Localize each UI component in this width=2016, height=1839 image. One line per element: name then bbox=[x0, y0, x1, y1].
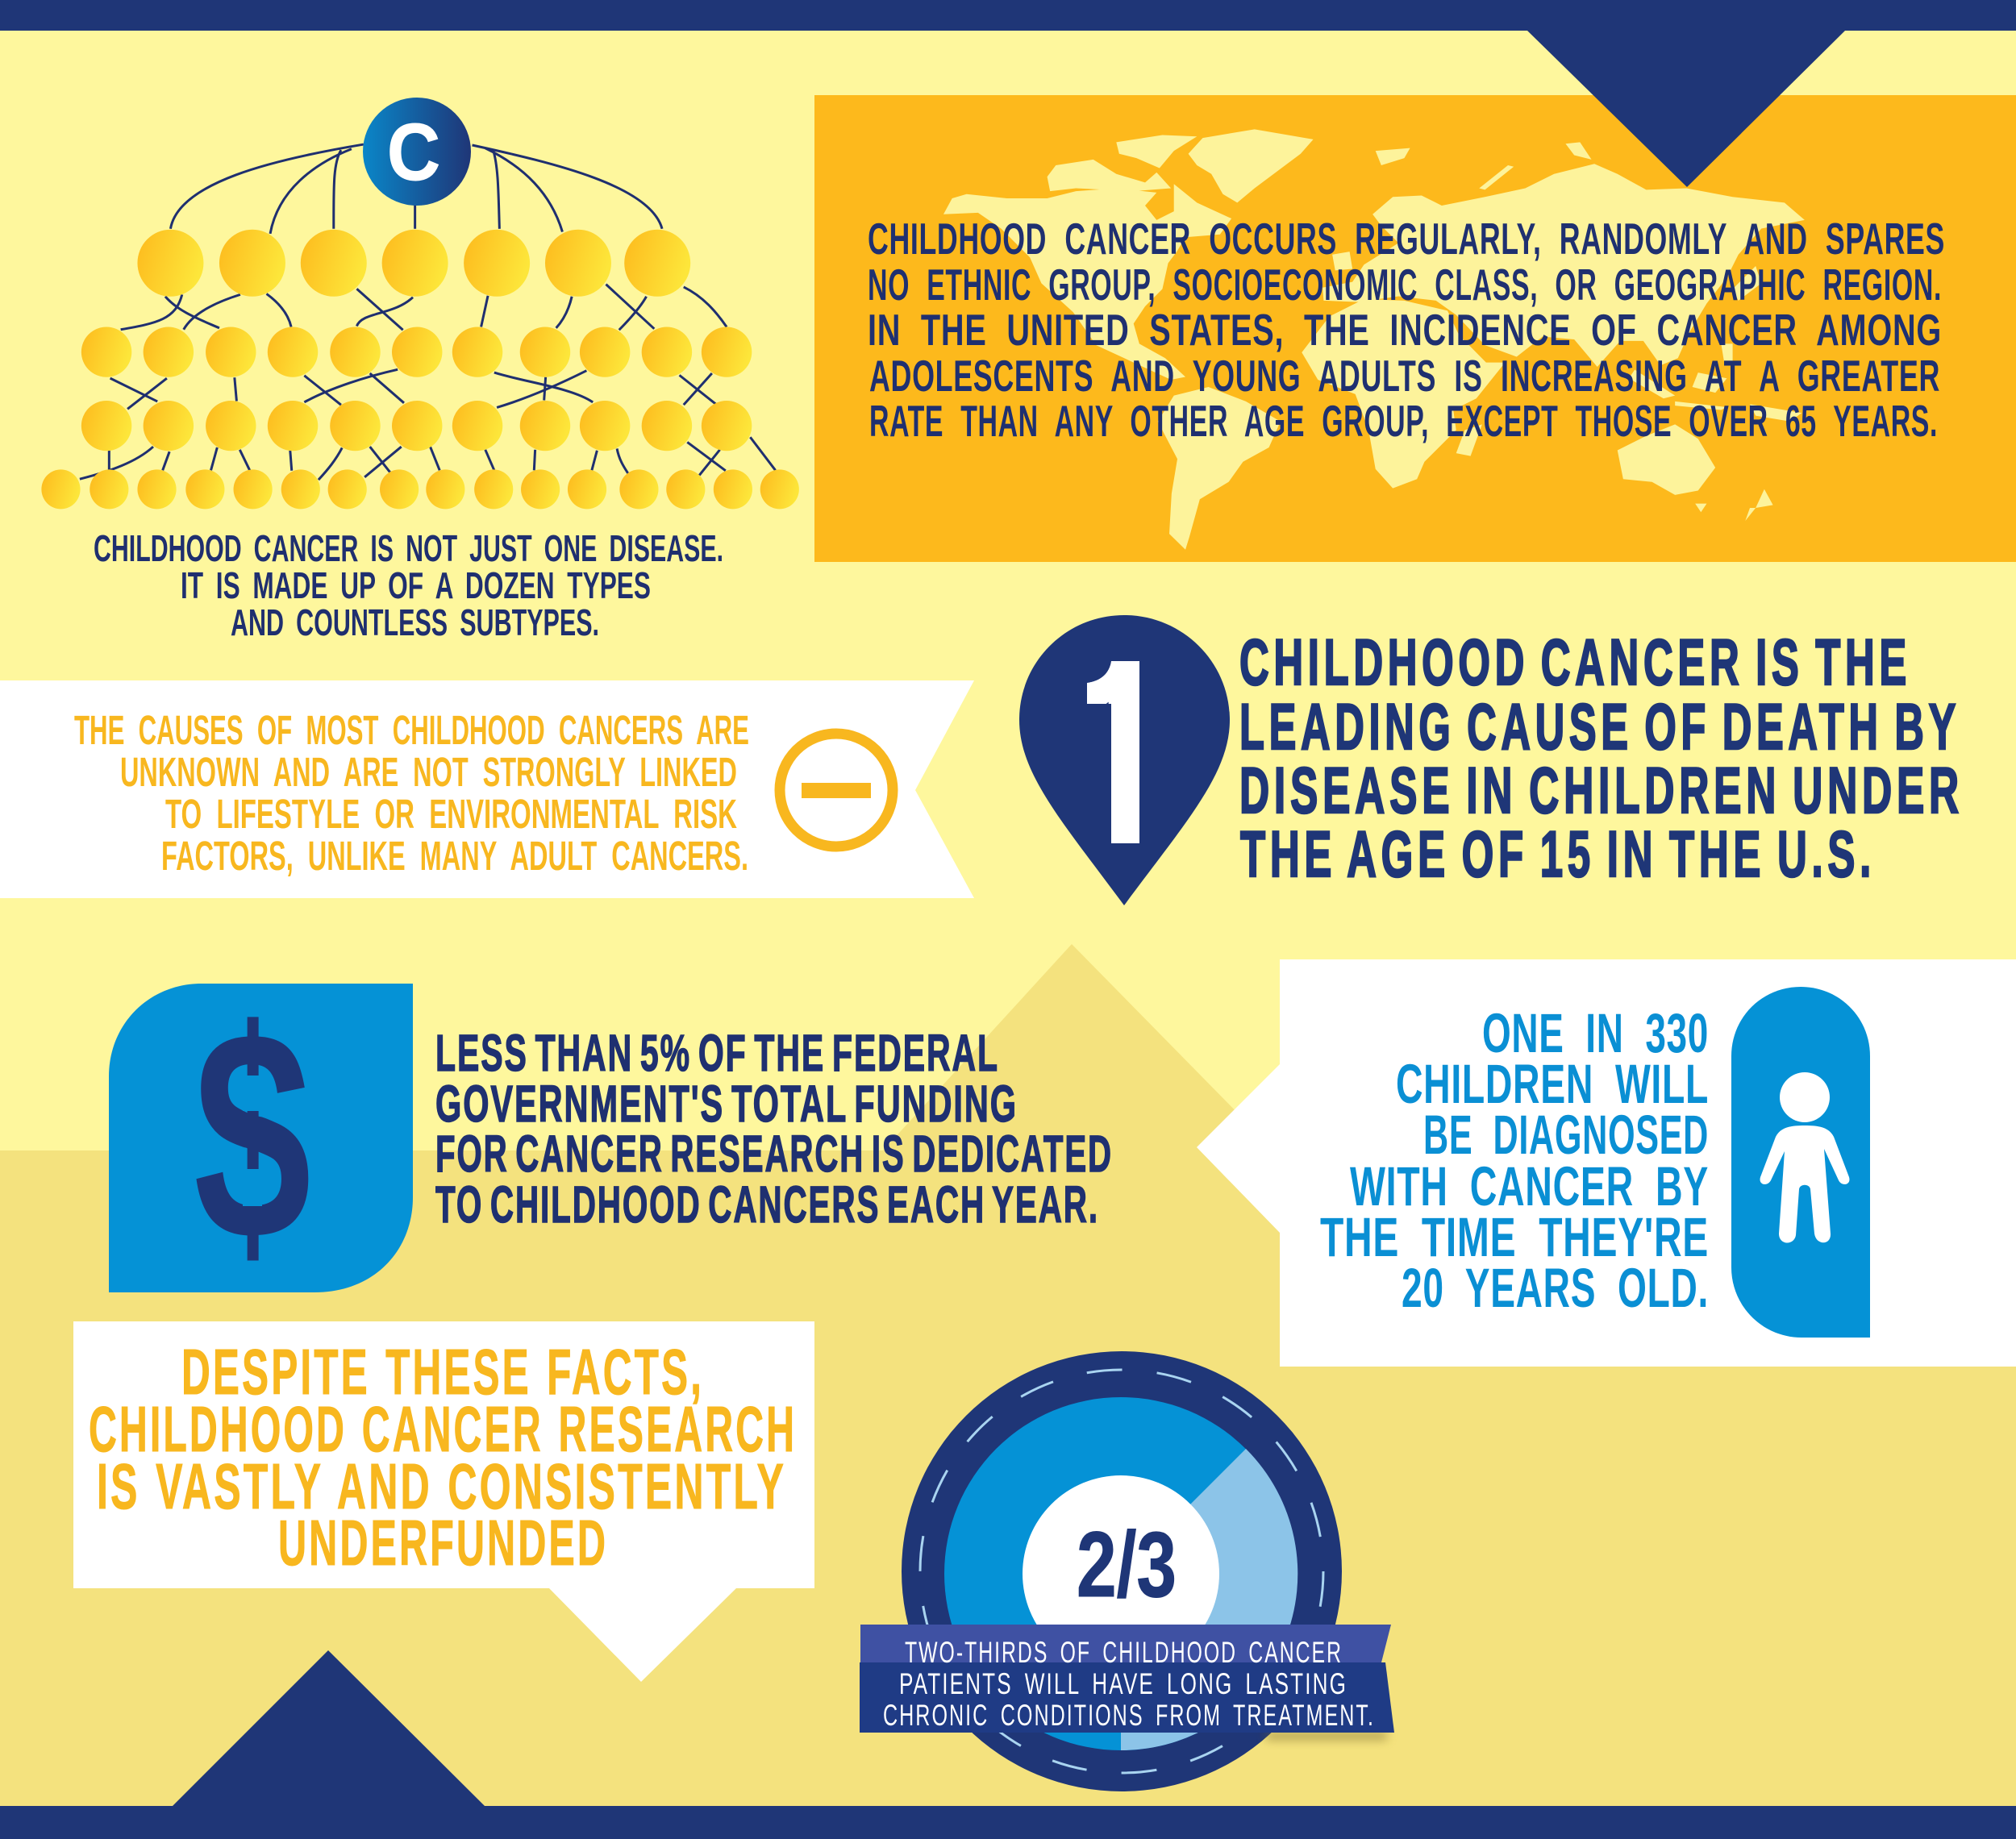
icon: dollar tile: $ bbox=[194, 969, 311, 1302]
text block: federal funding: LESS THAN 5% OF THE FEDERAL bbox=[435, 1024, 999, 1082]
text block: federal funding bbox=[435, 1024, 1113, 1234]
panel: causes ribbon bbox=[0, 680, 974, 898]
icon: child in blue pill bbox=[1731, 987, 1870, 1338]
icon: letter C badge: C bbox=[387, 107, 440, 198]
causes text: THE CAUSES OF MOST CHILDHOOD CANCERS ARE bbox=[74, 707, 749, 753]
causes text: FACTORS, UNLIKE MANY ADULT CANCERS. bbox=[161, 833, 748, 879]
one in 330 text: WITH CANCER BY bbox=[1350, 1155, 1709, 1217]
background: darker yellow lower area bbox=[0, 944, 2016, 1839]
one in 330 text: BE DIAGNOSED bbox=[1423, 1104, 1709, 1166]
icon: letter C badge bbox=[363, 98, 471, 206]
ribbon lower band bbox=[860, 1662, 1394, 1733]
icon: number one location pin: 1 bbox=[1064, 605, 1178, 899]
ring dashes bbox=[920, 1370, 1323, 1773]
ribbon upper band bbox=[860, 1625, 1391, 1662]
bubble shape bbox=[73, 1321, 814, 1682]
text block: federal funding: TO CHILDHOOD CANCERS EACH YEAR. bbox=[435, 1175, 1099, 1234]
tree caption text: AND COUNTLESS SUBTYPES. bbox=[231, 601, 599, 643]
underfunded text bbox=[89, 1336, 797, 1579]
underfunded text: CHILDHOOD CANCER RESEARCH bbox=[89, 1393, 797, 1465]
panel: one in 330 callout bbox=[1197, 959, 2016, 1367]
label: 2/3: 2/3 bbox=[1077, 1513, 1177, 1616]
ribbon text: TWO-THIRDS OF CHILDHOOD CANCER bbox=[905, 1636, 1343, 1669]
ribbon shape bbox=[0, 680, 974, 898]
badge outer ring bbox=[902, 1351, 1342, 1791]
icon: dollar tile bbox=[109, 969, 413, 1302]
chart: two-thirds donut badge bbox=[860, 1351, 1394, 1791]
world map continents bbox=[943, 129, 1805, 550]
pie: two-thirds segment bbox=[944, 1397, 1297, 1750]
tree nodes bbox=[41, 230, 799, 509]
heading: leading cause of death bbox=[1239, 626, 1964, 891]
causes text: UNKNOWN AND ARE NOT STRONGLY LINKED bbox=[120, 749, 737, 795]
one in 330 text: CHILDREN WILL bbox=[1396, 1053, 1709, 1115]
tree connector lines bbox=[80, 144, 776, 480]
callout shape bbox=[1197, 959, 2016, 1367]
causes text bbox=[74, 707, 749, 879]
ribbon shadow bbox=[1266, 1732, 1387, 1740]
bottom navy bar bbox=[0, 1806, 2016, 1839]
panel: underfunded speech bubble bbox=[73, 1321, 814, 1682]
underfunded text: DESPITE THESE FACTS, bbox=[181, 1336, 704, 1408]
ribbon text bbox=[883, 1636, 1375, 1732]
one in 330 text: 20 YEARS OLD. bbox=[1402, 1257, 1709, 1319]
text block: federal funding: FOR CANCER RESEARCH IS DEDICATED bbox=[435, 1125, 1113, 1183]
icon: minus circle bbox=[780, 734, 893, 847]
map background bbox=[814, 95, 2016, 562]
tree caption text bbox=[94, 527, 723, 643]
text block: federal funding: GOVERNMENT'S TOTAL FUNDING bbox=[435, 1075, 1018, 1133]
underfunded text: UNDERFUNDED bbox=[278, 1507, 608, 1579]
icon: number one location pin bbox=[1019, 605, 1230, 905]
one in 330 text: ONE IN 330 bbox=[1482, 1002, 1709, 1064]
one in 330 text: THE TIME THEY'RE bbox=[1320, 1206, 1709, 1268]
underfunded text: IS VASTLY AND CONSISTENTLY bbox=[97, 1450, 786, 1522]
bottom navy triangle bbox=[173, 1650, 485, 1806]
panel: world map bbox=[814, 95, 2016, 562]
top navy triangle bbox=[1527, 31, 1845, 187]
ribbon text: PATIENTS WILL HAVE LONG LASTING bbox=[899, 1667, 1347, 1700]
map text block bbox=[868, 214, 1945, 446]
pie centre bbox=[1023, 1475, 1219, 1672]
one in 330 text bbox=[1320, 1002, 1709, 1319]
ribbon text: CHRONIC CONDITIONS FROM TREATMENT. bbox=[883, 1699, 1375, 1732]
causes text: TO LIFESTYLE OR ENVIRONMENTAL RISK bbox=[165, 791, 737, 837]
pie: remaining segment bbox=[1121, 1449, 1297, 1750]
tree caption text: IT IS MADE UP OF A DOZEN TYPES bbox=[181, 564, 651, 606]
tree caption text: CHILDHOOD CANCER IS NOT JUST ONE DISEASE. bbox=[94, 527, 723, 569]
chart: cancer type tree bbox=[41, 98, 799, 509]
top navy bar bbox=[0, 0, 2016, 31]
